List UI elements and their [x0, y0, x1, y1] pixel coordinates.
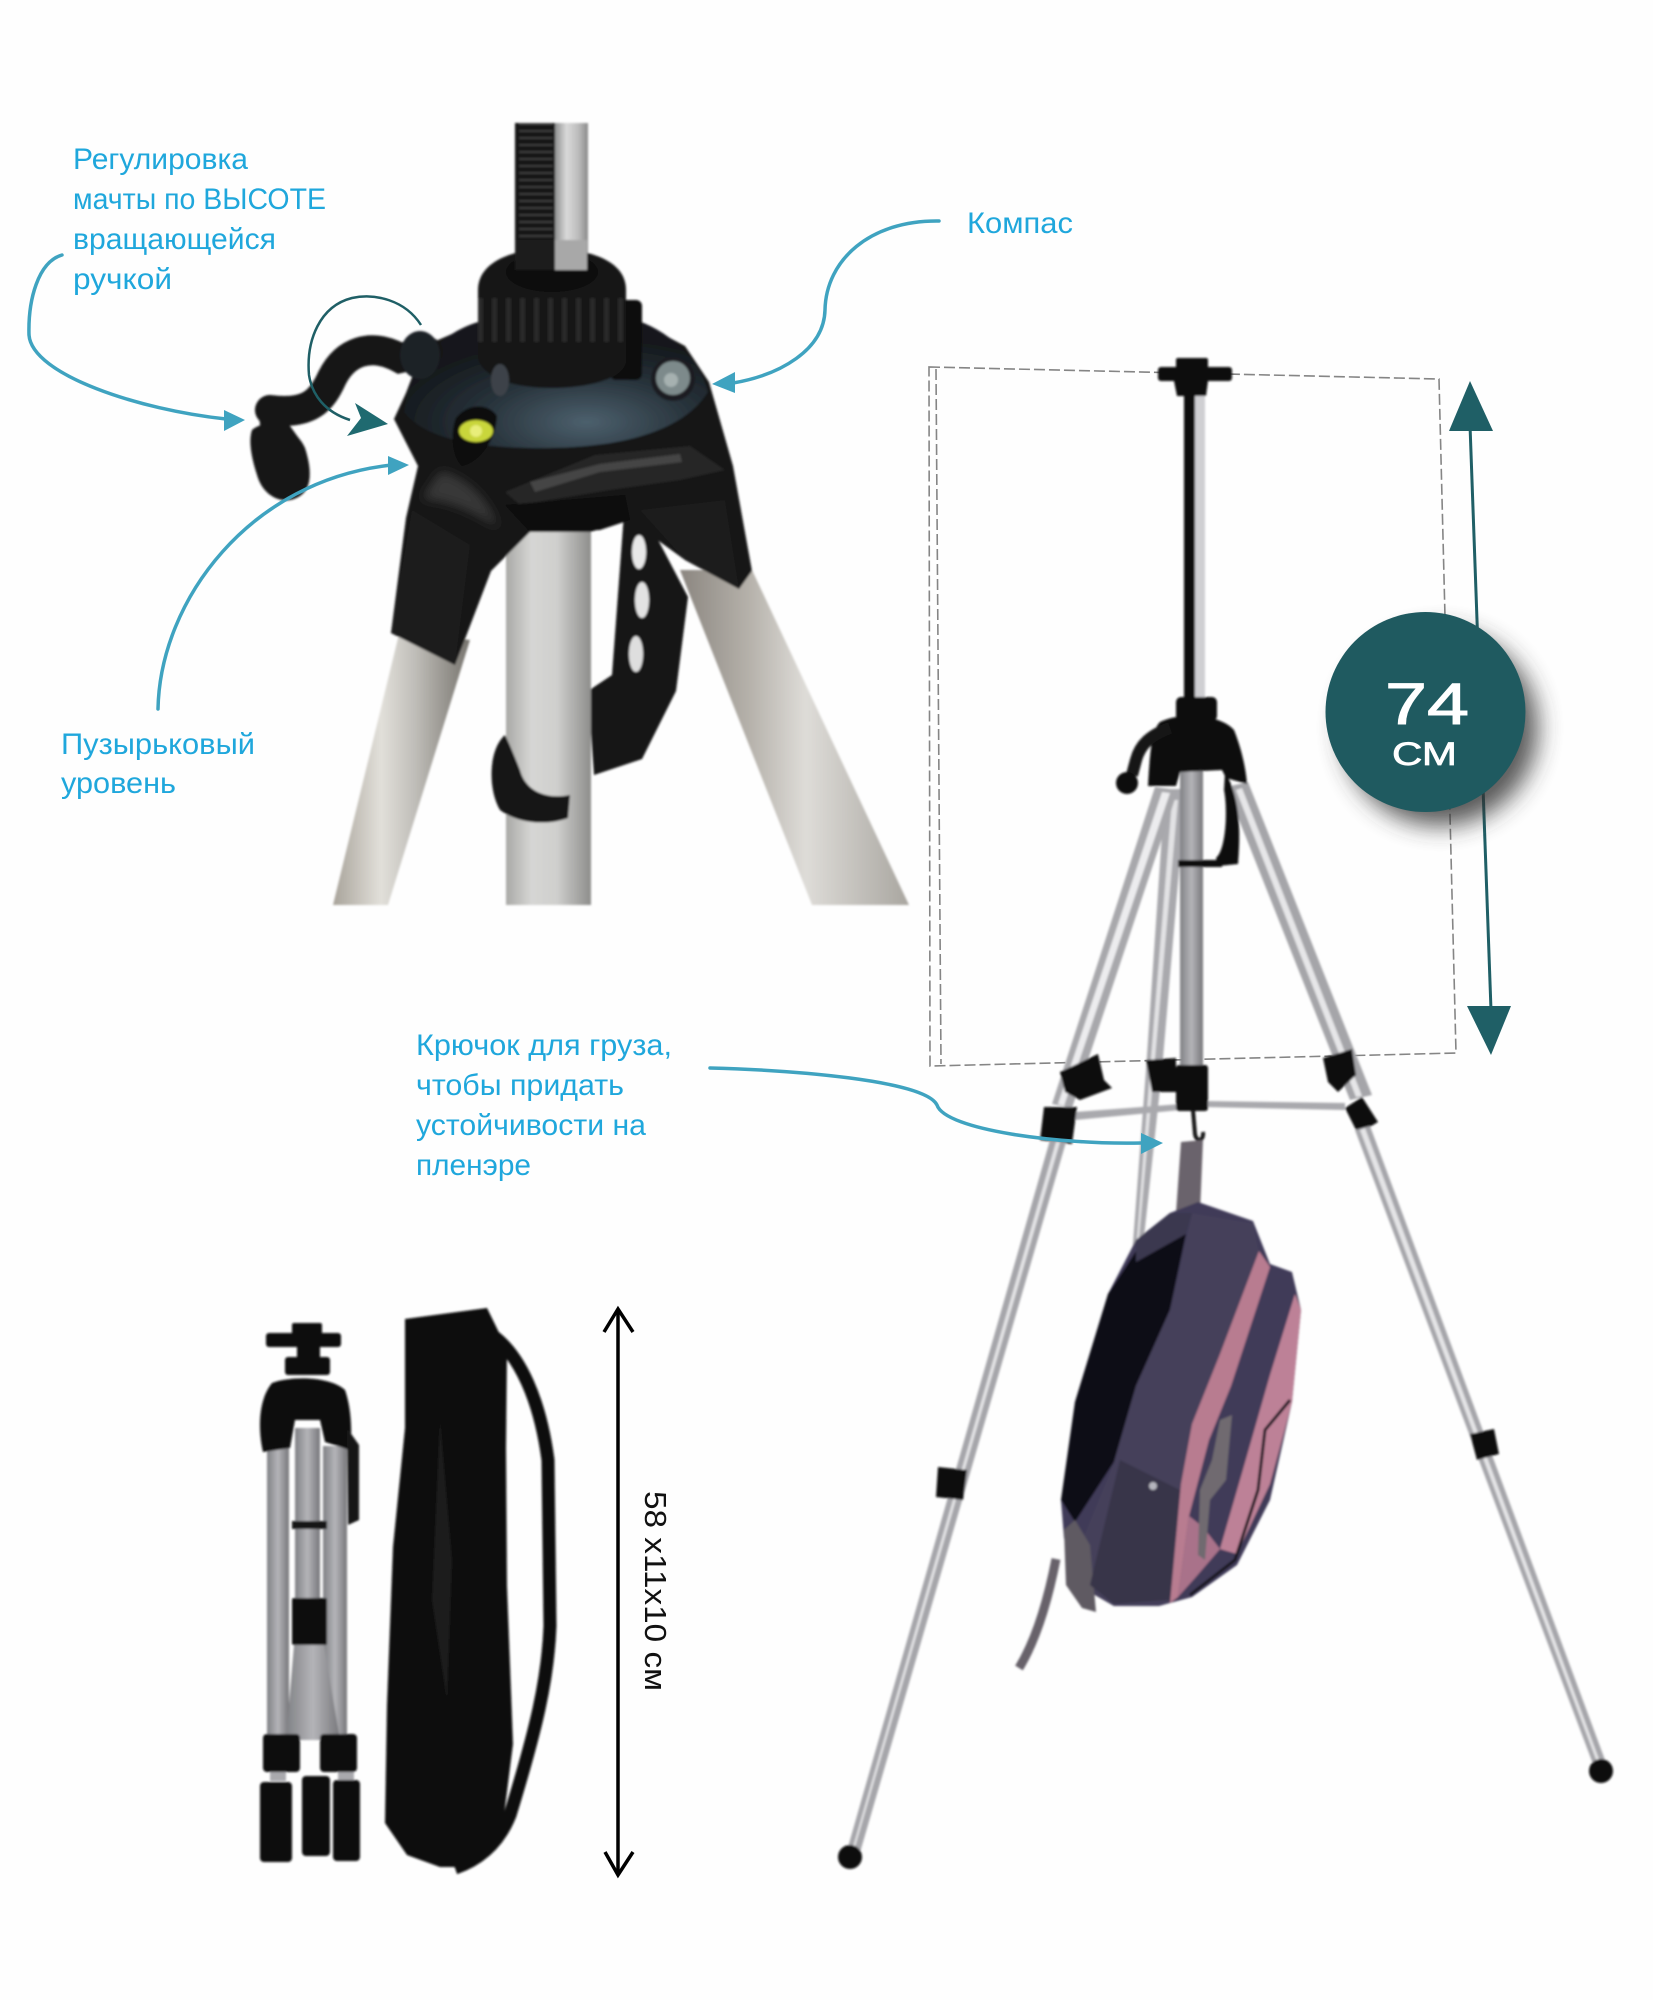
- hook: [1193, 1110, 1203, 1140]
- upper shell edge: [1136, 1213, 1192, 1262]
- leg clamps: [1040, 1049, 1378, 1144]
- caption: height adjustment: мачты по ВЫСОТЕ: [73, 183, 326, 216]
- handle arm and knob: [250, 331, 440, 500]
- clamps and feet: [260, 1734, 360, 1862]
- right leg lower highlight: [1360, 1128, 1603, 1770]
- backpack: [1019, 1140, 1301, 1668]
- front pink panel: [1220, 1294, 1301, 1554]
- badge: 74 cm: 74: [1385, 672, 1469, 737]
- grey side straps: [1198, 1415, 1232, 1560]
- left leg lower: [846, 1140, 1066, 1856]
- middle band: [292, 1521, 327, 1529]
- knee blocks and feet: [838, 1429, 1613, 1869]
- middle block: [292, 1598, 327, 1645]
- load hook with holes: [588, 500, 688, 775]
- lower pink patch: [1178, 1516, 1220, 1597]
- badge: 74 cm: СМ: [1392, 736, 1457, 772]
- caption: load hook: чтобы придать: [416, 1069, 624, 1102]
- top plate: [1158, 358, 1232, 396]
- front slot: [505, 446, 725, 505]
- side pocket shading: [1090, 1460, 1180, 1604]
- arrow: compass: [712, 221, 939, 393]
- rear leg highlight: [1136, 800, 1178, 1250]
- mast with threaded rack: [515, 123, 588, 303]
- badge: 74 cm: [1326, 612, 1538, 826]
- arrow: load hook: [710, 1068, 1163, 1154]
- arch underside: [505, 495, 630, 532]
- right leg upper highlight: [1236, 788, 1362, 1097]
- column clip: [492, 735, 570, 823]
- caption: load hook: [416, 1029, 672, 1182]
- caption: bubble level: [61, 728, 255, 800]
- right leg upper: [1226, 782, 1372, 1100]
- black cord: [1190, 1400, 1290, 1595]
- centre column: [506, 510, 591, 905]
- tube glints: [270, 1772, 354, 1781]
- caption: height adjustment: Регулировка: [73, 143, 248, 176]
- head body: [391, 318, 752, 665]
- back pad: [1061, 1234, 1186, 1522]
- caption: compass: Компас: [967, 207, 1073, 240]
- left leg upper highlight: [1058, 792, 1170, 1106]
- main purple body: [1081, 1213, 1259, 1606]
- caption: height adjustment: ручкой: [73, 263, 172, 296]
- upper head: [260, 1323, 351, 1452]
- left leg upper: [1052, 787, 1178, 1108]
- photo: full tripod with backpack: [838, 358, 1613, 1869]
- arrow: bubble level: [158, 456, 409, 709]
- bag strap: [455, 1335, 550, 1868]
- leg socket edges: [391, 510, 470, 665]
- head: [1116, 697, 1247, 867]
- caption: load hook: Крючок для груза,: [416, 1029, 672, 1062]
- right leg: [680, 570, 909, 905]
- caption: bubble level: Пузырьковый: [61, 728, 255, 761]
- lower strap: [1019, 1559, 1056, 1668]
- right leg lower: [1355, 1126, 1608, 1772]
- caption: bubble level: уровень: [61, 767, 176, 800]
- locking collar: [478, 240, 642, 396]
- bag body: [385, 1308, 513, 1867]
- side clip: [347, 1428, 359, 1525]
- brace bars: [1075, 1101, 1345, 1120]
- base silhouette: [1061, 1202, 1301, 1606]
- carry bag: [385, 1308, 550, 1868]
- caption: load hook: пленэре: [416, 1149, 531, 1182]
- arrow: height adjustment: [29, 255, 245, 431]
- dimension arrow: [604, 1309, 633, 1875]
- caption: height adjustment: вращающейся: [73, 223, 276, 256]
- centre rear leg: [1132, 789, 1186, 1256]
- bag folds: [432, 1420, 452, 1700]
- height arrow: [1449, 381, 1511, 1055]
- bubble level: [453, 406, 497, 466]
- hanging strap: [1176, 1140, 1203, 1213]
- pink stripe: [1170, 1251, 1270, 1603]
- centre column lower: [1180, 760, 1203, 1070]
- rotation arrow: [309, 296, 421, 436]
- photo: folded tripod: [260, 1323, 360, 1862]
- dome top: [404, 318, 708, 448]
- left leg: [333, 630, 470, 905]
- compass: [651, 357, 695, 401]
- caption: load hook: устойчивости на: [416, 1109, 646, 1142]
- caption: height adjustment: [73, 143, 326, 296]
- bottom tab: [1064, 1520, 1096, 1612]
- mast top section: [1184, 390, 1205, 700]
- dashed canvas frame: [929, 367, 1456, 1066]
- left leg lower highlight: [851, 1142, 1060, 1854]
- body highlight: [420, 470, 500, 530]
- photo: tripod head close-up: [250, 123, 909, 905]
- dimension label: 58 x11x10 см: [638, 1491, 673, 1691]
- tubes: [267, 1428, 347, 1740]
